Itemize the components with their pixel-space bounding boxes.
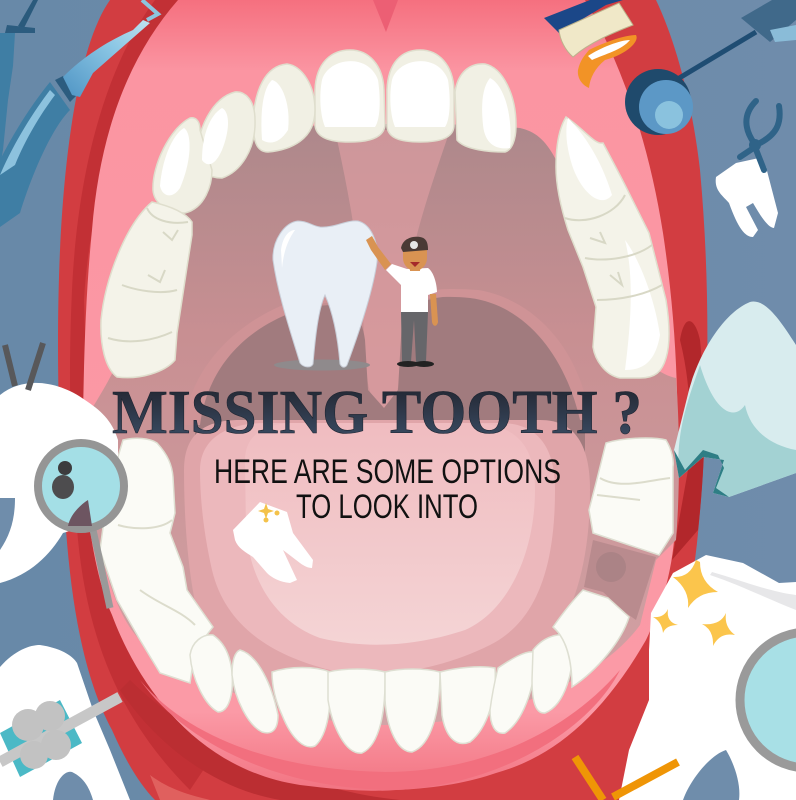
subtitle bbox=[214, 453, 561, 526]
gap where tooth is missing bbox=[584, 540, 656, 620]
subtitle: TO LOOK INTO bbox=[296, 488, 478, 526]
upper front teeth bbox=[153, 50, 516, 213]
front tooth highlights bbox=[160, 61, 511, 195]
toothpaste tube bbox=[544, 0, 637, 88]
title: MISSING TOOTH ? bbox=[112, 379, 642, 447]
tongue bbox=[184, 420, 590, 708]
gums bbox=[83, 0, 677, 791]
small tooth with forceps bbox=[716, 101, 780, 237]
palate centre bbox=[335, 130, 450, 408]
dentist character bbox=[366, 236, 438, 367]
bottom-left tooth with braces bbox=[0, 645, 130, 800]
bottom-right tooth with sparkles bbox=[575, 555, 796, 800]
subtitle: HERE ARE SOME OPTIONS bbox=[214, 453, 561, 491]
throat bbox=[195, 296, 585, 470]
lower molar creases bbox=[118, 478, 670, 625]
dental mirror top right bbox=[625, 0, 796, 135]
left white tooth with mirror bbox=[0, 343, 124, 608]
left instruments bbox=[0, 0, 158, 227]
large tooth bbox=[273, 221, 377, 370]
upper molars bbox=[101, 117, 669, 378]
lower teeth bbox=[100, 438, 673, 753]
mouth interior bbox=[85, 124, 679, 725]
small sparkling tooth bbox=[233, 502, 313, 583]
teal broken tooth bbox=[674, 302, 796, 497]
